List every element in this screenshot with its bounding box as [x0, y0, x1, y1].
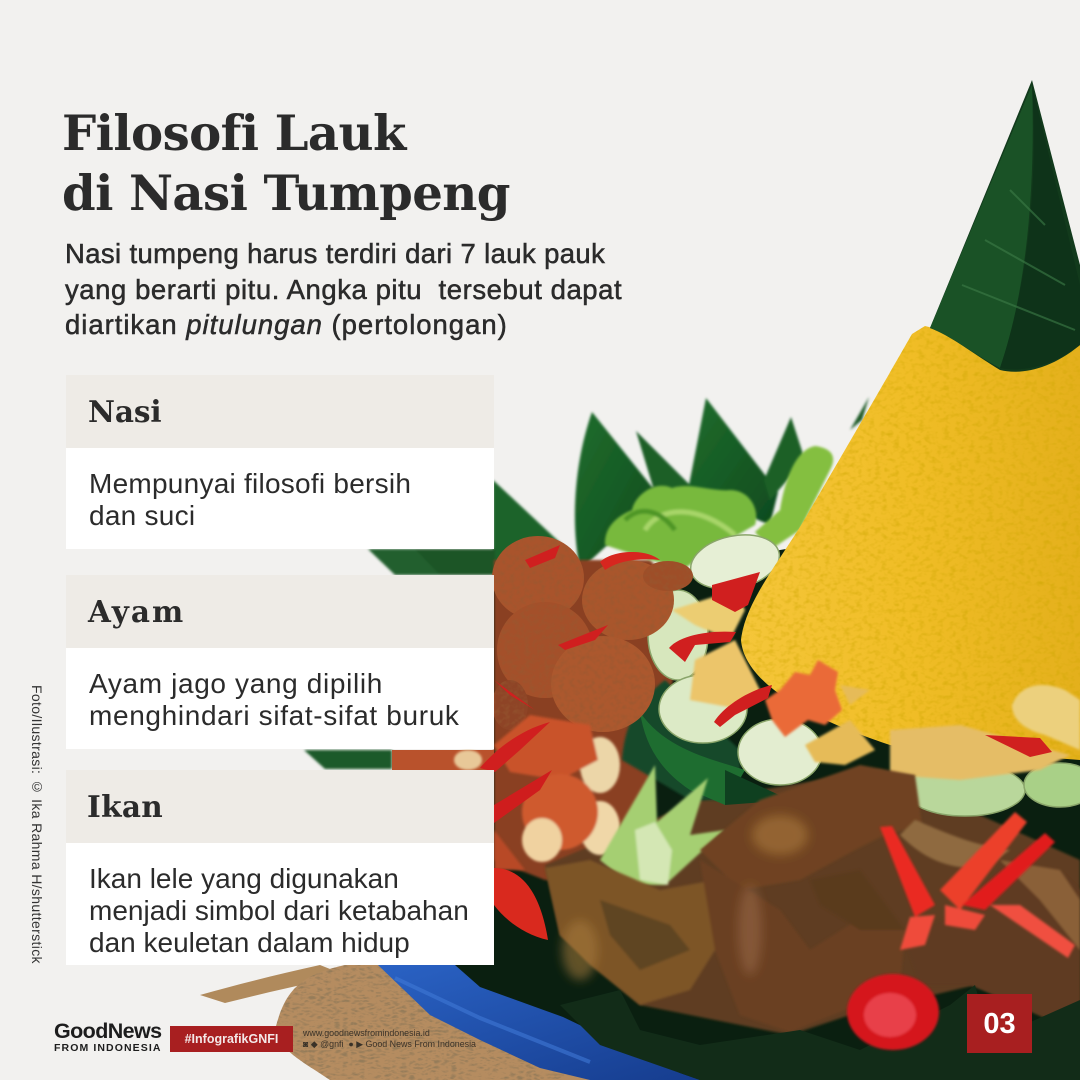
banana leaf cone on top — [930, 80, 1080, 372]
burlap mat — [200, 965, 590, 1080]
panel: ayam — [66, 575, 494, 749]
banana leaves behind — [304, 397, 869, 769]
hashtag badge: #InfografikGNFI — [185, 1032, 278, 1046]
leaf folds along the tray — [560, 985, 1080, 1080]
intro text: yang berarti pitu. Angka pitu tersebut dapat — [65, 274, 622, 304]
website and social links — [303, 1028, 476, 1049]
red chili flower — [880, 812, 1075, 958]
title: Filosofi Lauk — [62, 106, 406, 162]
yellow rice cone — [735, 320, 1080, 760]
omelette shreds — [672, 590, 1080, 780]
panel: ayam: menghindari sifat-sifat buruk — [89, 700, 460, 731]
website and social links: www.goodnewsfromindonesia.id — [303, 1028, 430, 1038]
panel: ayam: Ayam — [88, 594, 185, 629]
title: di Nasi Tumpeng — [62, 166, 510, 222]
panel: ayam: Ayam jago yang dipilih — [89, 668, 383, 699]
photo credit: Foto/Ilustrasi: © Ika Rahma H/shutterstick — [29, 685, 45, 964]
intro text: Nasi tumpeng harus terdiri dari 7 lauk pauk — [65, 238, 605, 269]
panel: ikan: dan keuletan dalam hidup — [89, 927, 410, 958]
intro text — [64, 238, 622, 340]
website and social links: ◙ ◆ @gnfi ● ▶ Good News From Indonesia — [303, 1039, 476, 1049]
intro text: diartikan pitulungan (pertolongan) — [65, 309, 508, 340]
lettuce — [605, 446, 833, 568]
red chilies — [480, 545, 1052, 940]
cucumber slices — [648, 527, 1080, 816]
carved cucumber garnish — [600, 765, 725, 885]
panel: ikan: Ikan lele yang digunakan — [89, 863, 399, 894]
carrot flower — [765, 660, 842, 737]
page number badge: 03 — [983, 1008, 1016, 1040]
panel: nasi: Nasi — [88, 394, 162, 429]
panel: ikan: menjadi simbol dari ketabahan — [89, 895, 469, 926]
food photo illustration — [200, 80, 1080, 1080]
logo: GoodNews From Indonesia — [54, 1019, 162, 1054]
base behind food — [392, 500, 1080, 1080]
panel: nasi — [66, 375, 494, 549]
blue basket rim — [378, 965, 730, 1080]
title — [62, 106, 510, 222]
page number badge — [967, 994, 1032, 1053]
panel: nasi: dan suci — [89, 500, 195, 531]
logo: GoodNews From Indonesia: GoodNews — [54, 1019, 162, 1043]
panel: nasi: Mempunyai filosofi bersih — [89, 468, 411, 499]
logo: GoodNews From Indonesia: FROM INDONESIA — [54, 1042, 162, 1054]
hashtag badge — [170, 1026, 293, 1052]
panel: ikan: Ikan — [87, 789, 163, 824]
tomato rose — [847, 974, 939, 1050]
fried chicken pieces — [492, 530, 700, 740]
eggs in sambal — [454, 715, 620, 870]
panel: ikan — [66, 770, 494, 965]
roasted chicken — [545, 765, 1080, 1032]
green leaf under cucumber — [622, 680, 790, 805]
